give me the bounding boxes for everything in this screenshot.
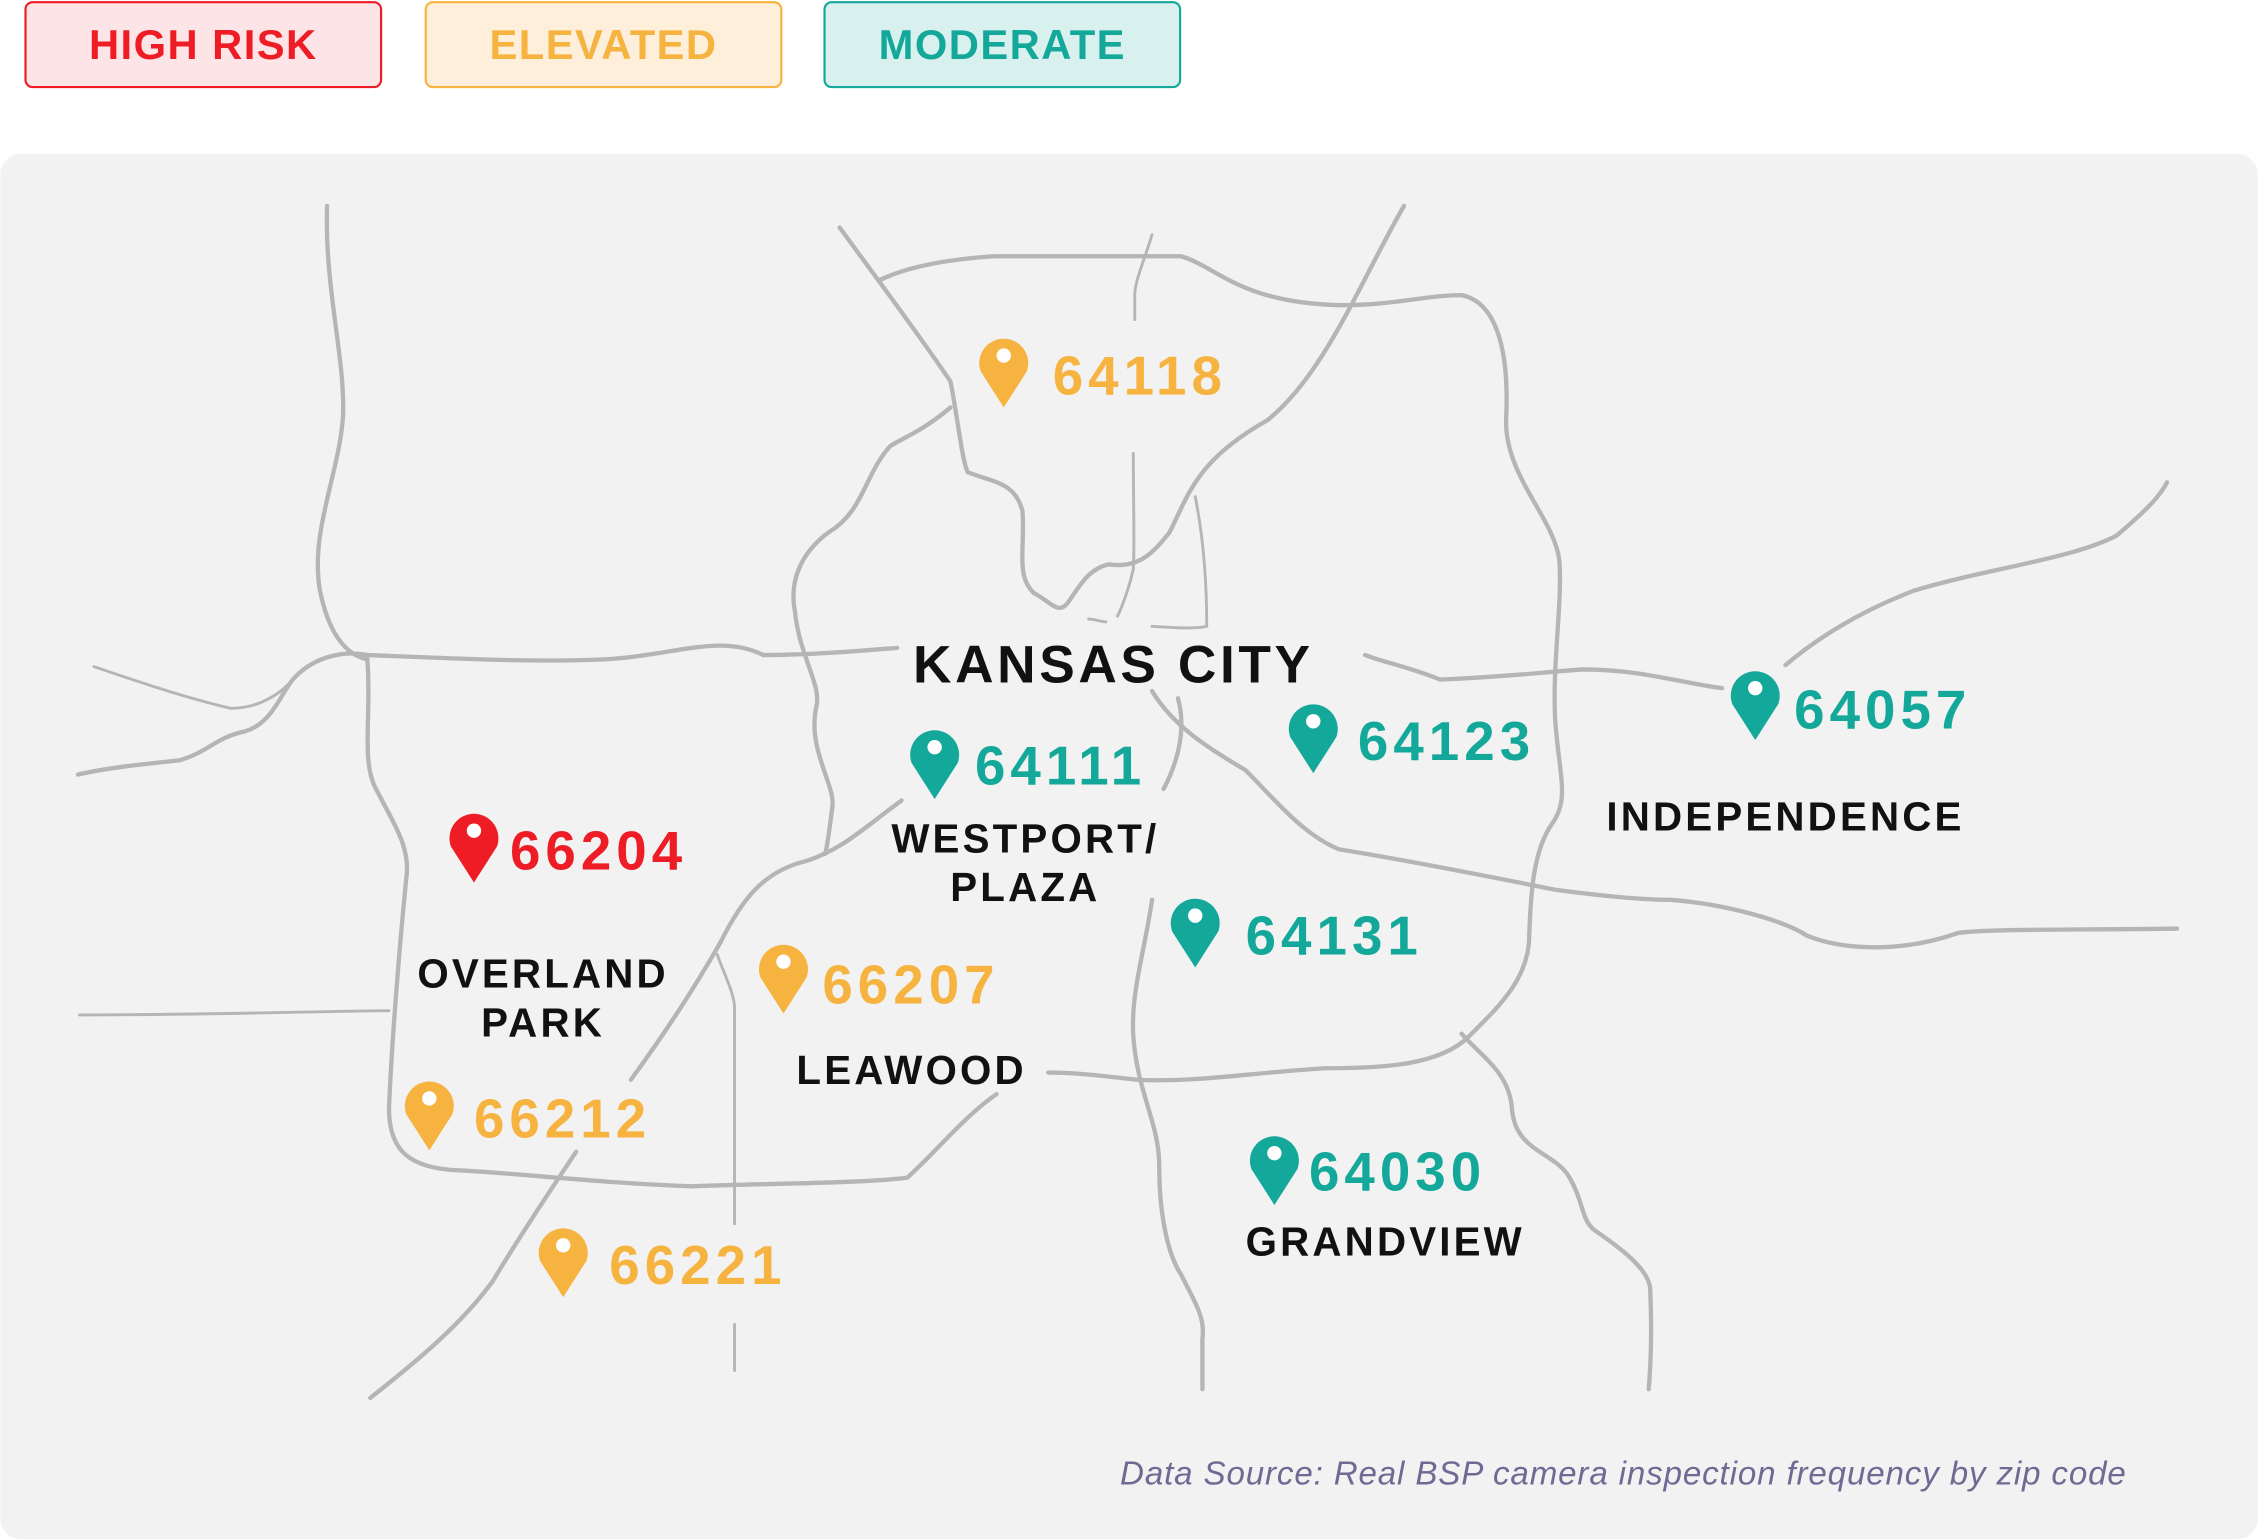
pin: 64118: 64118	[1053, 344, 1227, 406]
pin: 66207: 66207	[822, 953, 1000, 1015]
legend: elevated	[426, 2, 781, 87]
label: Overland Park: OVERLAND	[417, 952, 669, 997]
label: Overland Park: PARK	[481, 1001, 605, 1046]
label: Westport/Plaza	[891, 816, 1159, 910]
pin: 66221	[539, 1228, 787, 1297]
pin: 64123: 64123	[1358, 710, 1535, 772]
pin: 64057	[1731, 671, 1971, 740]
pin: 64111	[910, 730, 1146, 799]
label: Westport/Plaza: WESTPORT/	[891, 816, 1159, 861]
pin: 66221: 66221	[609, 1234, 787, 1296]
pin: 66207	[759, 945, 1000, 1015]
pin: 64030: 64030	[1309, 1141, 1486, 1203]
data source note: Data Source: Real BSP camera inspection frequency by zip code	[1120, 1455, 2127, 1492]
pin: 66212: 66212	[474, 1087, 651, 1149]
legend: moderate: MODERATE	[879, 21, 1126, 68]
label: Westport/Plaza: PLAZA	[950, 865, 1100, 910]
pin: 64123	[1289, 704, 1535, 773]
pin: 64118	[979, 339, 1227, 407]
roads	[78, 206, 2177, 1398]
pin: 64030	[1250, 1136, 1486, 1205]
label: Kansas City: KANSAS CITY	[913, 635, 1314, 694]
legend: moderate	[825, 2, 1180, 87]
pin: 66204	[449, 814, 687, 883]
label: Independence: INDEPENDENCE	[1606, 795, 1965, 840]
pin: 64057: 64057	[1794, 678, 1971, 740]
pin: 66204: 66204	[510, 820, 687, 882]
legend: elevated: ELEVATED	[490, 21, 718, 68]
pin: 64131: 64131	[1246, 904, 1423, 966]
pin: 64131	[1171, 899, 1423, 967]
pin: 66212	[405, 1082, 651, 1150]
pin: 64111: 64111	[975, 735, 1146, 797]
label: Leawood: LEAWOOD	[796, 1048, 1027, 1093]
legend: high risk	[25, 2, 381, 87]
legend: high risk: HIGH RISK	[89, 21, 318, 68]
label: Grandview: GRANDVIEW	[1246, 1219, 1525, 1264]
label: Overland Park	[417, 952, 669, 1046]
